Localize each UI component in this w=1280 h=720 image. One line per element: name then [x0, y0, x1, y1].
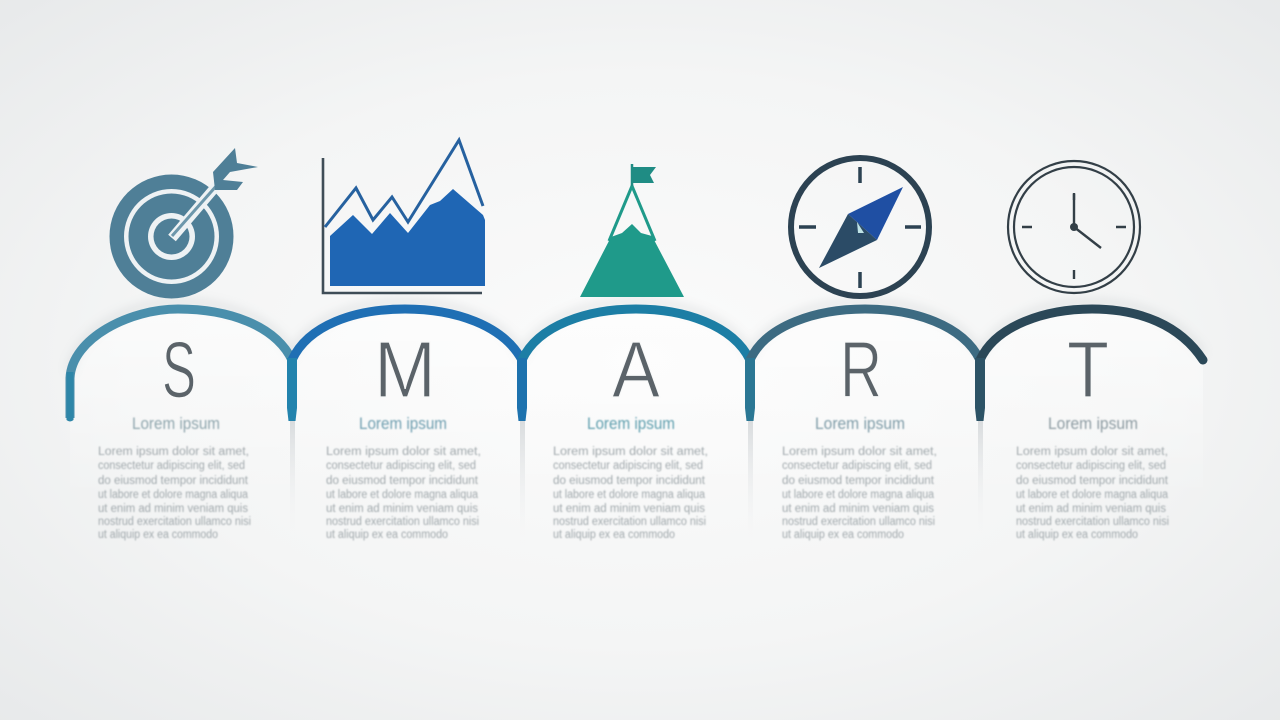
body S: do eiusmod tempor incididunt: [98, 475, 249, 487]
body A: [553, 446, 708, 541]
column A text: [553, 414, 708, 541]
icon: mountain with flag: [580, 164, 684, 297]
body T: ut enim ad minim veniam quis: [1016, 503, 1166, 515]
heading R: Lorem ipsum: [815, 414, 905, 433]
icon: clock: [1008, 161, 1140, 293]
arch T: [975, 309, 1203, 421]
heading S: Lorem ipsum: [132, 414, 220, 433]
body T: ut aliquip ex ea commodo: [1016, 529, 1138, 541]
body T: ut labore et dolore magna aliqua: [1016, 489, 1169, 501]
letter M: M: [374, 325, 436, 414]
column R text: [782, 414, 937, 541]
body T: consectetur adipiscing elit, sed: [1016, 460, 1166, 472]
body S: nostrud exercitation ullamco nisi: [98, 516, 251, 528]
icon: compass: [791, 158, 929, 296]
letter A: A: [612, 325, 661, 414]
body A: Lorem ipsum dolor sit amet,: [553, 446, 708, 458]
heading M: Lorem ipsum: [359, 414, 447, 433]
body S: ut aliquip ex ea commodo: [98, 529, 218, 541]
arch M: [287, 309, 522, 421]
fading divider lines: [290, 420, 983, 545]
body M: ut aliquip ex ea commodo: [326, 529, 448, 541]
body A: ut labore et dolore magna aliqua: [553, 489, 706, 501]
body T: do eiusmod tempor incididunt: [1016, 475, 1169, 487]
body T: Lorem ipsum dolor sit amet,: [1016, 446, 1168, 458]
body M: consectetur adipiscing elit, sed: [326, 460, 476, 472]
body A: do eiusmod tempor incididunt: [553, 475, 706, 487]
body M: do eiusmod tempor incididunt: [326, 475, 479, 487]
letter R: R: [840, 325, 882, 414]
body S: ut labore et dolore magna aliqua: [98, 489, 249, 501]
body M: ut enim ad minim veniam quis: [326, 503, 478, 515]
icon: area chart: [323, 140, 485, 293]
arch A: [517, 309, 750, 421]
body S: [98, 446, 251, 541]
body A: ut aliquip ex ea commodo: [553, 529, 675, 541]
body R: do eiusmod tempor incididunt: [782, 475, 935, 487]
body S: ut enim ad minim veniam quis: [98, 503, 248, 515]
heading T: Lorem ipsum: [1048, 414, 1138, 433]
body R: nostrud exercitation ullamco nisi: [782, 516, 935, 528]
body S: Lorem ipsum dolor sit amet,: [98, 446, 249, 458]
body M: ut labore et dolore magna aliqua: [326, 489, 479, 501]
body R: ut labore et dolore magna aliqua: [782, 489, 935, 501]
letter S: S: [162, 325, 196, 414]
icon: target with arrow: [110, 148, 258, 298]
body M: [326, 446, 481, 541]
body A: consectetur adipiscing elit, sed: [553, 460, 703, 472]
arch shadows: [70, 302, 1203, 372]
body R: Lorem ipsum dolor sit amet,: [782, 446, 937, 458]
body A: ut enim ad minim veniam quis: [553, 503, 705, 515]
body M: Lorem ipsum dolor sit amet,: [326, 446, 481, 458]
body R: [782, 446, 937, 541]
column M text: [326, 414, 481, 541]
column T text: [1016, 414, 1169, 541]
body R: consectetur adipiscing elit, sed: [782, 460, 932, 472]
panel backgrounds under arches: [70, 309, 1203, 500]
column S text: [98, 414, 251, 541]
body R: ut enim ad minim veniam quis: [782, 503, 934, 515]
body A: nostrud exercitation ullamco nisi: [553, 516, 706, 528]
arch R: [745, 309, 980, 421]
heading A: Lorem ipsum: [587, 414, 675, 433]
body T: nostrud exercitation ullamco nisi: [1016, 516, 1169, 528]
letter T: T: [1067, 325, 1109, 414]
body T: [1016, 446, 1169, 541]
body S: consectetur adipiscing elit, sed: [98, 460, 245, 472]
body M: nostrud exercitation ullamco nisi: [326, 516, 479, 528]
body R: ut aliquip ex ea commodo: [782, 529, 904, 541]
arch S: [66, 309, 292, 422]
